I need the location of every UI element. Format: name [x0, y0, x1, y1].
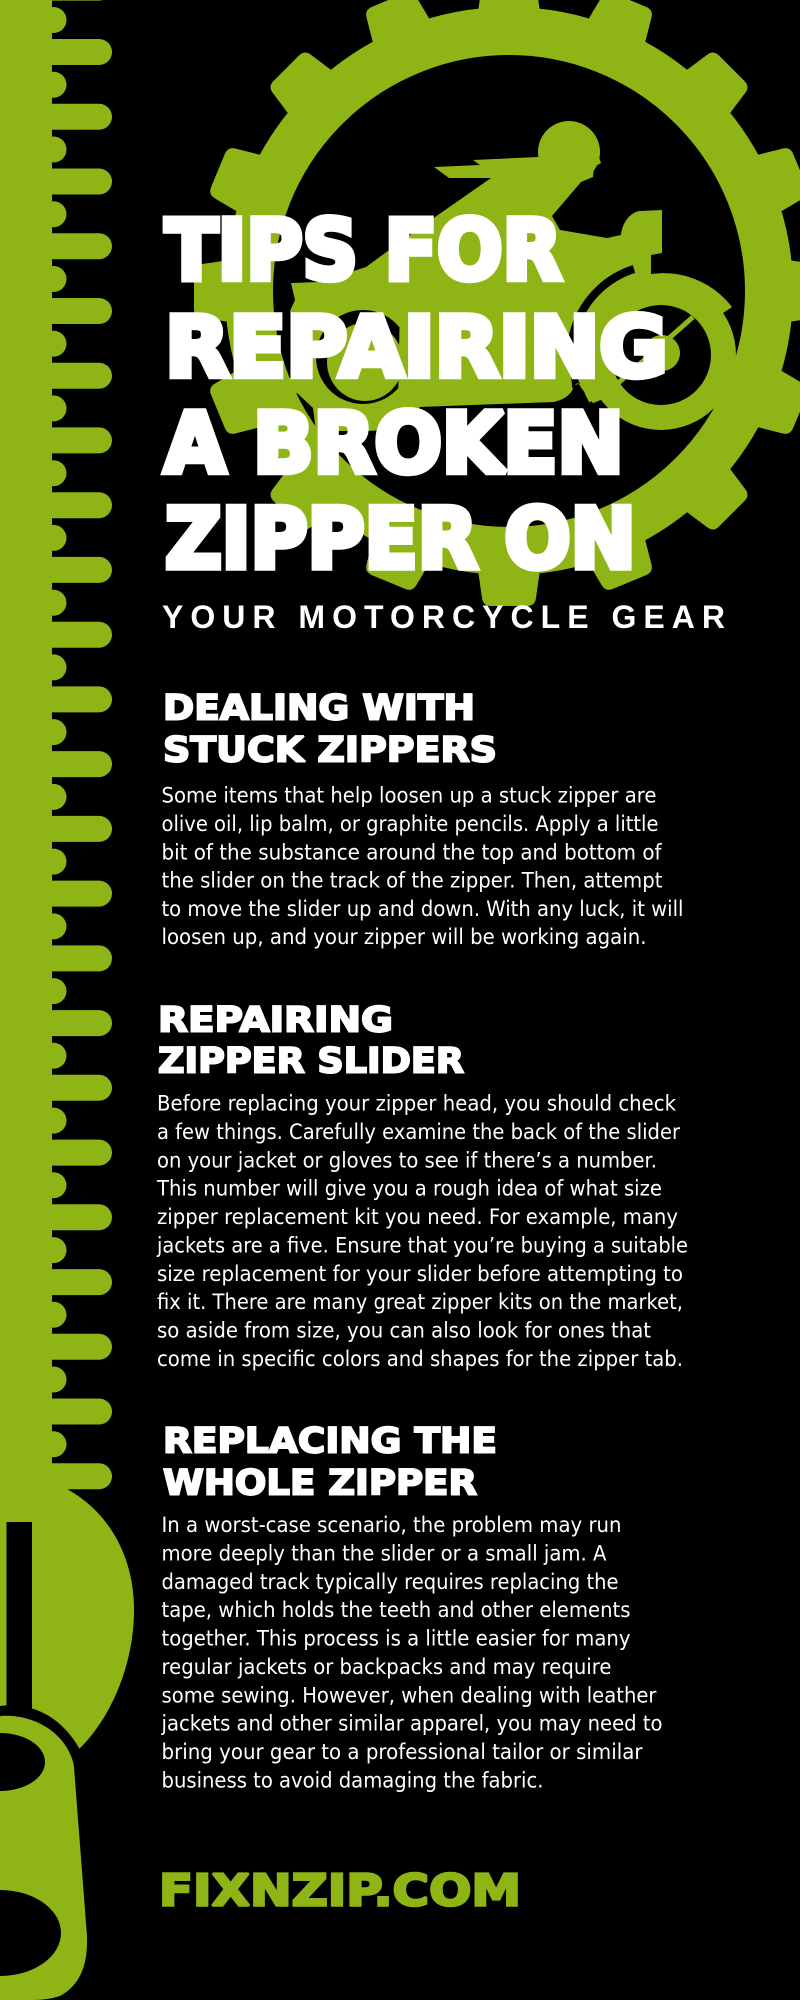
body text: the slider on the track of the zipper. Then, attempt — [162, 869, 662, 893]
body fill repaired under rear of gap — [574, 380, 603, 403]
icon: gear — [194, 0, 800, 606]
body text: In a worst-case scenario, the problem may run — [162, 1513, 622, 1537]
body text: on your jacket or gloves to see if there’s a number. — [157, 1148, 657, 1172]
front wheel opening — [611, 305, 711, 405]
body text: so aside from size, you can also look for ones that — [157, 1319, 651, 1343]
body text: fix it. There are many great zipper kits on the market, — [157, 1290, 683, 1314]
title: ZIPPER ON — [165, 490, 636, 587]
icon: gear with motorcycle rider — [194, 0, 800, 606]
body text: a few things. Carefully examine the back of the slider — [157, 1120, 680, 1144]
body text: come in specific colors and shapes for the zipper tab. — [157, 1347, 683, 1371]
body text: olive oil, lip balm, or graphite pencils. Apply a little — [162, 812, 658, 836]
zipper tape and teeth — [0, 0, 112, 1500]
heading: DEALING WITH — [163, 689, 475, 729]
body text: some sewing. However, when dealing with leather — [162, 1683, 657, 1707]
body text: bring your gear to a professional tailor or similar — [162, 1740, 643, 1764]
heading: WHOLE ZIPPER — [163, 1464, 477, 1504]
section: replacing the whole zipper — [161, 1421, 663, 1792]
icon: zipper slider and pull tab — [0, 1480, 134, 2000]
body text: tape, which holds the teeth and other elements — [162, 1598, 630, 1622]
title — [164, 202, 668, 587]
heading — [158, 1001, 464, 1081]
body text — [161, 1513, 663, 1792]
front wheel hub — [644, 335, 680, 371]
front fender — [578, 273, 732, 403]
slider slot — [6, 1522, 32, 1712]
body text: jackets and other similar apparel, you may need to — [161, 1712, 663, 1736]
body text: Before replacing your zipper head, you should check — [157, 1092, 677, 1116]
heading: REPAIRING — [158, 1001, 393, 1041]
body text: together. This process is a little easier for many — [162, 1627, 630, 1651]
body text: loosen up, and your zipper will be working again. — [162, 925, 646, 949]
body text: bit of the substance around the top and bottom of — [162, 840, 662, 864]
rear wheel ring gap — [316, 310, 410, 404]
body text: zipper replacement kit you need. For example, many — [157, 1205, 678, 1229]
heading: STUCK ZIPPERS — [163, 731, 497, 771]
gap between body and fender — [571, 269, 634, 407]
heading: REPLACING THE — [163, 1421, 497, 1461]
pull tab — [0, 1716, 87, 2000]
title: A BROKEN — [164, 395, 624, 492]
footer: website: FIXNZIP.COM — [159, 1866, 521, 1916]
pull tab outline — [0, 1705, 90, 1800]
heading — [163, 1421, 497, 1504]
body text: to move the slider up and down. With any luck, it will — [162, 897, 684, 921]
body text: damaged track typically requires replacing the — [162, 1570, 618, 1594]
pull tab upper hole — [0, 1733, 45, 1791]
section: repairing zipper slider — [156, 1001, 688, 1371]
slider body — [0, 1480, 134, 1760]
body text: business to avoid damaging the fabric. — [162, 1768, 544, 1792]
title: TIPS FOR — [165, 202, 562, 299]
body text: Some items that help loosen up a stuck zipper are — [162, 784, 656, 808]
section: dealing with stuck zippers — [162, 689, 684, 949]
icon: motorcycle and rider silhouette — [273, 121, 736, 431]
body text: jackets are a five. Ensure that you’re buying a suitable — [156, 1233, 688, 1257]
body text — [162, 784, 684, 949]
heading: ZIPPER SLIDER — [158, 1041, 464, 1081]
body text: This number will give you a rough idea of what size — [156, 1177, 662, 1201]
title: REPAIRING — [165, 299, 668, 396]
front wheel ring — [586, 280, 736, 430]
front wheel spokes — [617, 317, 693, 384]
subtitle: YOUR MOTORCYCLE GEAR — [162, 599, 725, 635]
rear wheel centre — [327, 323, 403, 401]
body text: regular jackets or backpacks and may require — [162, 1655, 612, 1679]
body text — [156, 1092, 688, 1371]
heading — [163, 689, 497, 771]
pull tab lower hole — [0, 1890, 61, 1976]
body over rear wheel — [398, 280, 572, 404]
body text: size replacement for your slider before attempting to — [157, 1262, 683, 1286]
body text: more deeply than the slider or a small jam. A — [162, 1541, 607, 1565]
